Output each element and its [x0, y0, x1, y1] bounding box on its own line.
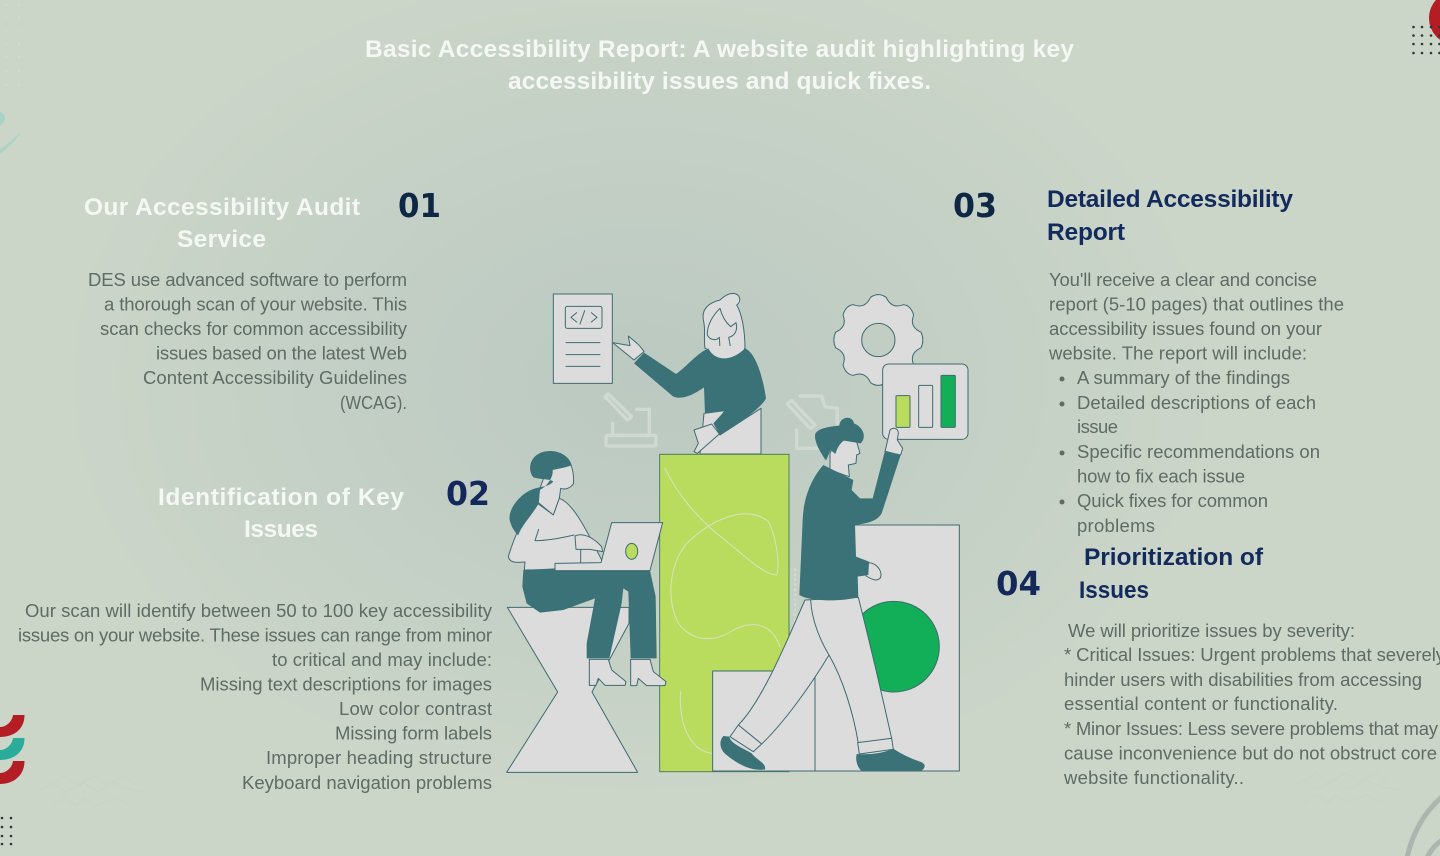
number 02: 02 — [446, 474, 490, 513]
text block 03: issue — [1077, 416, 1118, 437]
text block 02: Missing text descriptions for images — [200, 674, 492, 694]
panel: 04 prioritization — [996, 544, 1440, 788]
title: Basic Accessibility Report: A website audit highlighting key — [365, 36, 1074, 63]
text block 04 — [1063, 620, 1440, 788]
gear icon — [834, 295, 923, 385]
heading 04 — [1079, 544, 1264, 604]
title: accessibility issues and quick fixes. — [508, 68, 931, 95]
text block 03: website. The report will include: — [1048, 342, 1307, 364]
text block 01: scan checks for common accessibility — [100, 318, 408, 339]
decoration: left red and teal arcs — [0, 715, 24, 784]
text block 03: accessibility issues found on your — [1049, 318, 1322, 339]
text block 01: issues based on the latest Web — [156, 342, 407, 364]
title — [365, 36, 1074, 95]
stool — [507, 607, 638, 772]
text block 01: a thorough scan of your website. This — [104, 294, 407, 314]
text block 02 — [18, 600, 493, 793]
text block 02: Missing form labels — [335, 722, 492, 744]
text block 03: problems — [1077, 515, 1155, 536]
faint pen and printer icon — [605, 394, 656, 446]
number 04: 04 — [996, 564, 1041, 603]
text block 03: Specific recommendations on — [1077, 441, 1320, 462]
text block 02: Keyboard navigation problems — [242, 772, 492, 793]
heading 01 — [84, 194, 360, 253]
decoration: top-left faint dots — [5, 4, 20, 86]
text block 03: report (5-10 pages) that outlines the — [1049, 294, 1344, 314]
panel: 02 key issues — [18, 474, 493, 793]
text block 02: Low color contrast — [339, 698, 492, 719]
text block 04: * Minor Issues: Less severe problems that may — [1064, 718, 1439, 739]
text block 02: Our scan will identify between 50 to 100 key accessibility — [25, 600, 493, 621]
text block 04: website functionality.. — [1063, 767, 1244, 788]
right grey block — [815, 525, 959, 771]
heading 02 — [158, 484, 404, 543]
number 01: 01 — [398, 186, 441, 225]
decoration: top-right dots — [1412, 26, 1440, 54]
heading 04: Prioritization of — [1084, 544, 1264, 571]
number 03: 03 — [953, 186, 997, 225]
text block 03 — [1048, 269, 1344, 536]
text block 04: * Critical Issues: Urgent problems that severely — [1064, 644, 1440, 665]
text block 04: hinder users with disabilities from accessing — [1064, 669, 1422, 690]
text block 03: how to fix each issue — [1077, 466, 1245, 486]
text block 03: Detailed descriptions of each — [1077, 392, 1316, 413]
heading 03: Detailed Accessibility — [1047, 186, 1293, 213]
text block 01: Content Accessibility Guidelines — [143, 367, 407, 388]
heading 03: Report — [1047, 219, 1125, 246]
decoration: left teal leaf — [0, 112, 21, 154]
text block 04: We will prioritize issues by severity: — [1068, 620, 1355, 641]
sitting woman — [508, 451, 666, 686]
text block 01: (WCAG). — [340, 392, 407, 413]
heading 01: Our Accessibility Audit — [84, 194, 360, 221]
heading 03 — [1047, 186, 1293, 246]
text block 03: You'll receive a clear and concise — [1049, 269, 1317, 290]
text block 03: Quick fixes for common — [1077, 490, 1268, 511]
walking man — [720, 418, 925, 771]
decoration: bottom-right faint chevrons — [1290, 773, 1402, 803]
heading 02: Issues — [244, 516, 318, 543]
heading 01: Service — [177, 226, 266, 253]
decoration: top-right red circle — [1429, 0, 1440, 45]
faint hatch behind man — [792, 568, 797, 622]
text block 03: A summary of the findings — [1077, 367, 1290, 388]
decoration: bottom-left dots — [1, 817, 12, 845]
text block 04: cause inconvenience but do not obstruct core — [1064, 742, 1437, 764]
document with code — [553, 294, 612, 383]
decoration: bottom-right grey arcs — [1407, 797, 1440, 856]
text block 02: to critical and may include: — [272, 649, 492, 670]
small grey block — [713, 671, 815, 771]
panel: 03 detailed report — [953, 186, 1344, 536]
decoration: bottom-left faint chevrons — [38, 776, 146, 806]
standing woman — [613, 293, 766, 454]
text block 02: Improper heading structure — [266, 747, 492, 768]
illustration: team working on accessibility — [507, 293, 968, 772]
panel: 01 audit service — [84, 186, 441, 413]
text block 04: essential content or functionality. — [1064, 693, 1338, 714]
chart card — [883, 364, 968, 439]
heading 02: Identification of Key — [158, 484, 404, 511]
text block 01: DES use advanced software to perform — [88, 269, 407, 290]
faint pen and document icon — [787, 396, 837, 448]
text block 01 — [88, 269, 408, 413]
heading 04: Issues — [1079, 577, 1149, 604]
text block 02: issues on your website. These issues can range from minor — [18, 624, 492, 646]
lime block — [660, 454, 789, 772]
green circle — [849, 601, 939, 692]
